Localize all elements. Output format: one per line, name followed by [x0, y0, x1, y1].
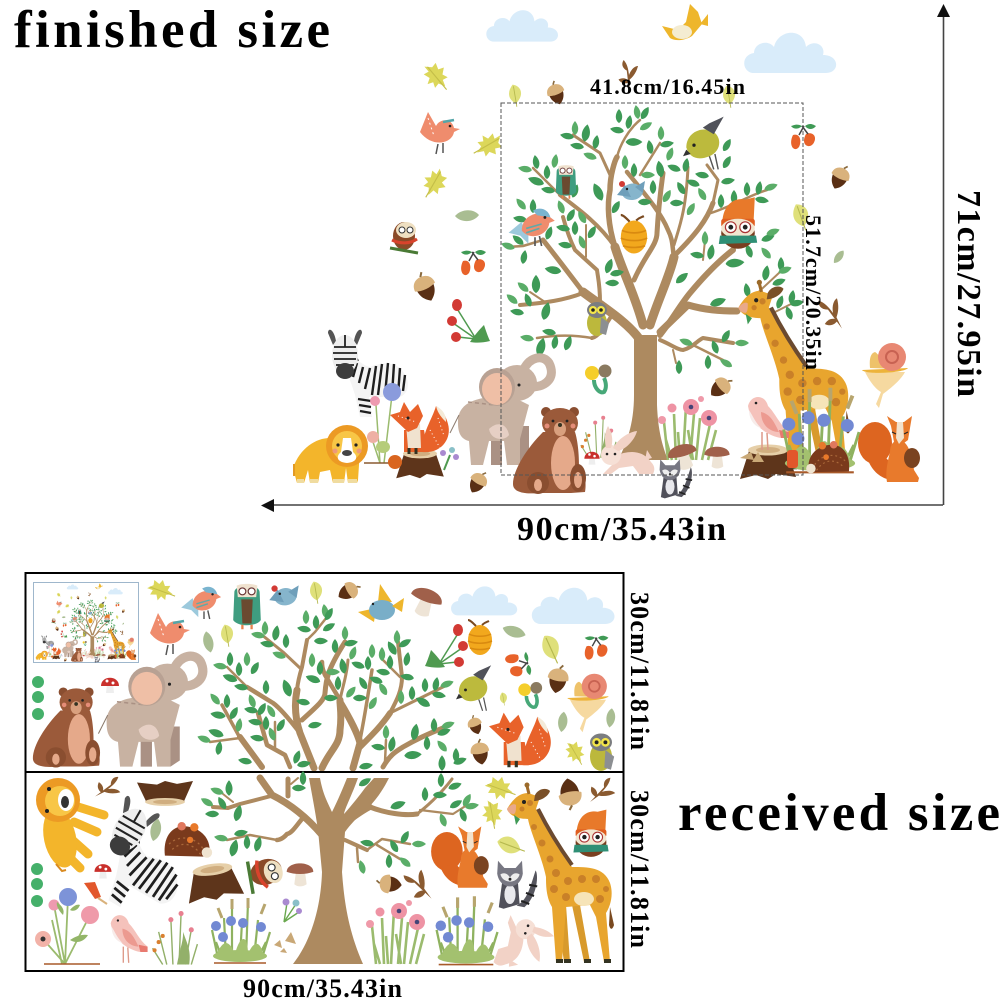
stickers in left column — [84, 772, 313, 904]
sheet 2 height label: 30cm/11.81in — [625, 790, 654, 949]
numbered green badges — [31, 863, 43, 907]
total height label: 71cm/27.95in — [950, 190, 987, 397]
mushroom sticker — [101, 678, 119, 693]
tree crown sticker — [196, 604, 468, 771]
zebra sticker — [77, 795, 206, 928]
width label of tree: 41.8cm/16.45in — [590, 74, 745, 99]
height label of tree: 51.7cm/20.35in — [801, 215, 826, 370]
animal: zebra — [328, 330, 408, 417]
lion sticker rotated — [36, 778, 104, 871]
stickers right of trunk — [375, 772, 620, 907]
flowers sticker — [35, 888, 100, 964]
trunk and branches sticker — [199, 771, 479, 964]
fox sticker — [489, 713, 551, 767]
panel: received sheet 1 — [26, 573, 624, 772]
animal: raccoon — [660, 459, 692, 498]
heading: received size: received size — [678, 784, 1000, 842]
blue flower grass sticker left — [211, 898, 270, 963]
rabbit sticker — [493, 913, 556, 980]
giraffe sticker — [507, 782, 614, 963]
finished wall scene — [293, 4, 920, 498]
squirrel sticker — [431, 826, 489, 888]
animal: squirrel — [858, 416, 920, 482]
small stickers at right of sheet 1 — [425, 620, 617, 771]
main tree on the wall — [500, 105, 804, 460]
birds and owls perched in the tree — [509, 117, 757, 402]
stump with fox — [388, 402, 459, 478]
title: finished size: finished size — [14, 1, 330, 59]
scattered stickers left of the tree — [390, 57, 735, 343]
plants and mushrooms by the trunk — [464, 396, 730, 497]
icon: flying yellow bird — [662, 4, 708, 40]
total width label: 90cm/35.43in — [517, 511, 726, 548]
pink flower grass sticker — [366, 900, 425, 964]
dashed tree size box — [501, 103, 803, 475]
arrow: total height — [937, 4, 950, 505]
animal: hedgehog — [806, 441, 849, 473]
animal: lion — [293, 425, 368, 483]
thumbnail of finished result — [34, 582, 138, 662]
stump with pink bird — [740, 397, 796, 479]
blue flower grass — [782, 388, 859, 472]
cloud right — [744, 33, 836, 73]
bear sticker — [33, 687, 100, 767]
sheet 1 height label: 30cm/11.81in — [625, 592, 654, 751]
scattered stickers right of the tree — [791, 124, 908, 408]
elephant sticker — [98, 656, 203, 767]
animal: elephant — [450, 358, 551, 465]
flowers behind fox — [364, 383, 401, 463]
animal: giraffe — [738, 280, 851, 469]
animal: rabbit — [601, 426, 654, 474]
numbered green badges — [32, 676, 44, 720]
animal: bear — [513, 407, 586, 494]
blue flower grass sticker right — [436, 896, 498, 965]
panel: received sheet 2 — [26, 771, 624, 980]
little flowers and mushrooms — [274, 898, 302, 953]
cloud left — [486, 10, 558, 42]
raccoon sticker — [497, 861, 537, 909]
grass with berries sticker — [153, 911, 197, 965]
sticker row one — [144, 576, 615, 655]
arrow: total width — [261, 499, 943, 512]
pink bird sticker — [111, 915, 148, 963]
